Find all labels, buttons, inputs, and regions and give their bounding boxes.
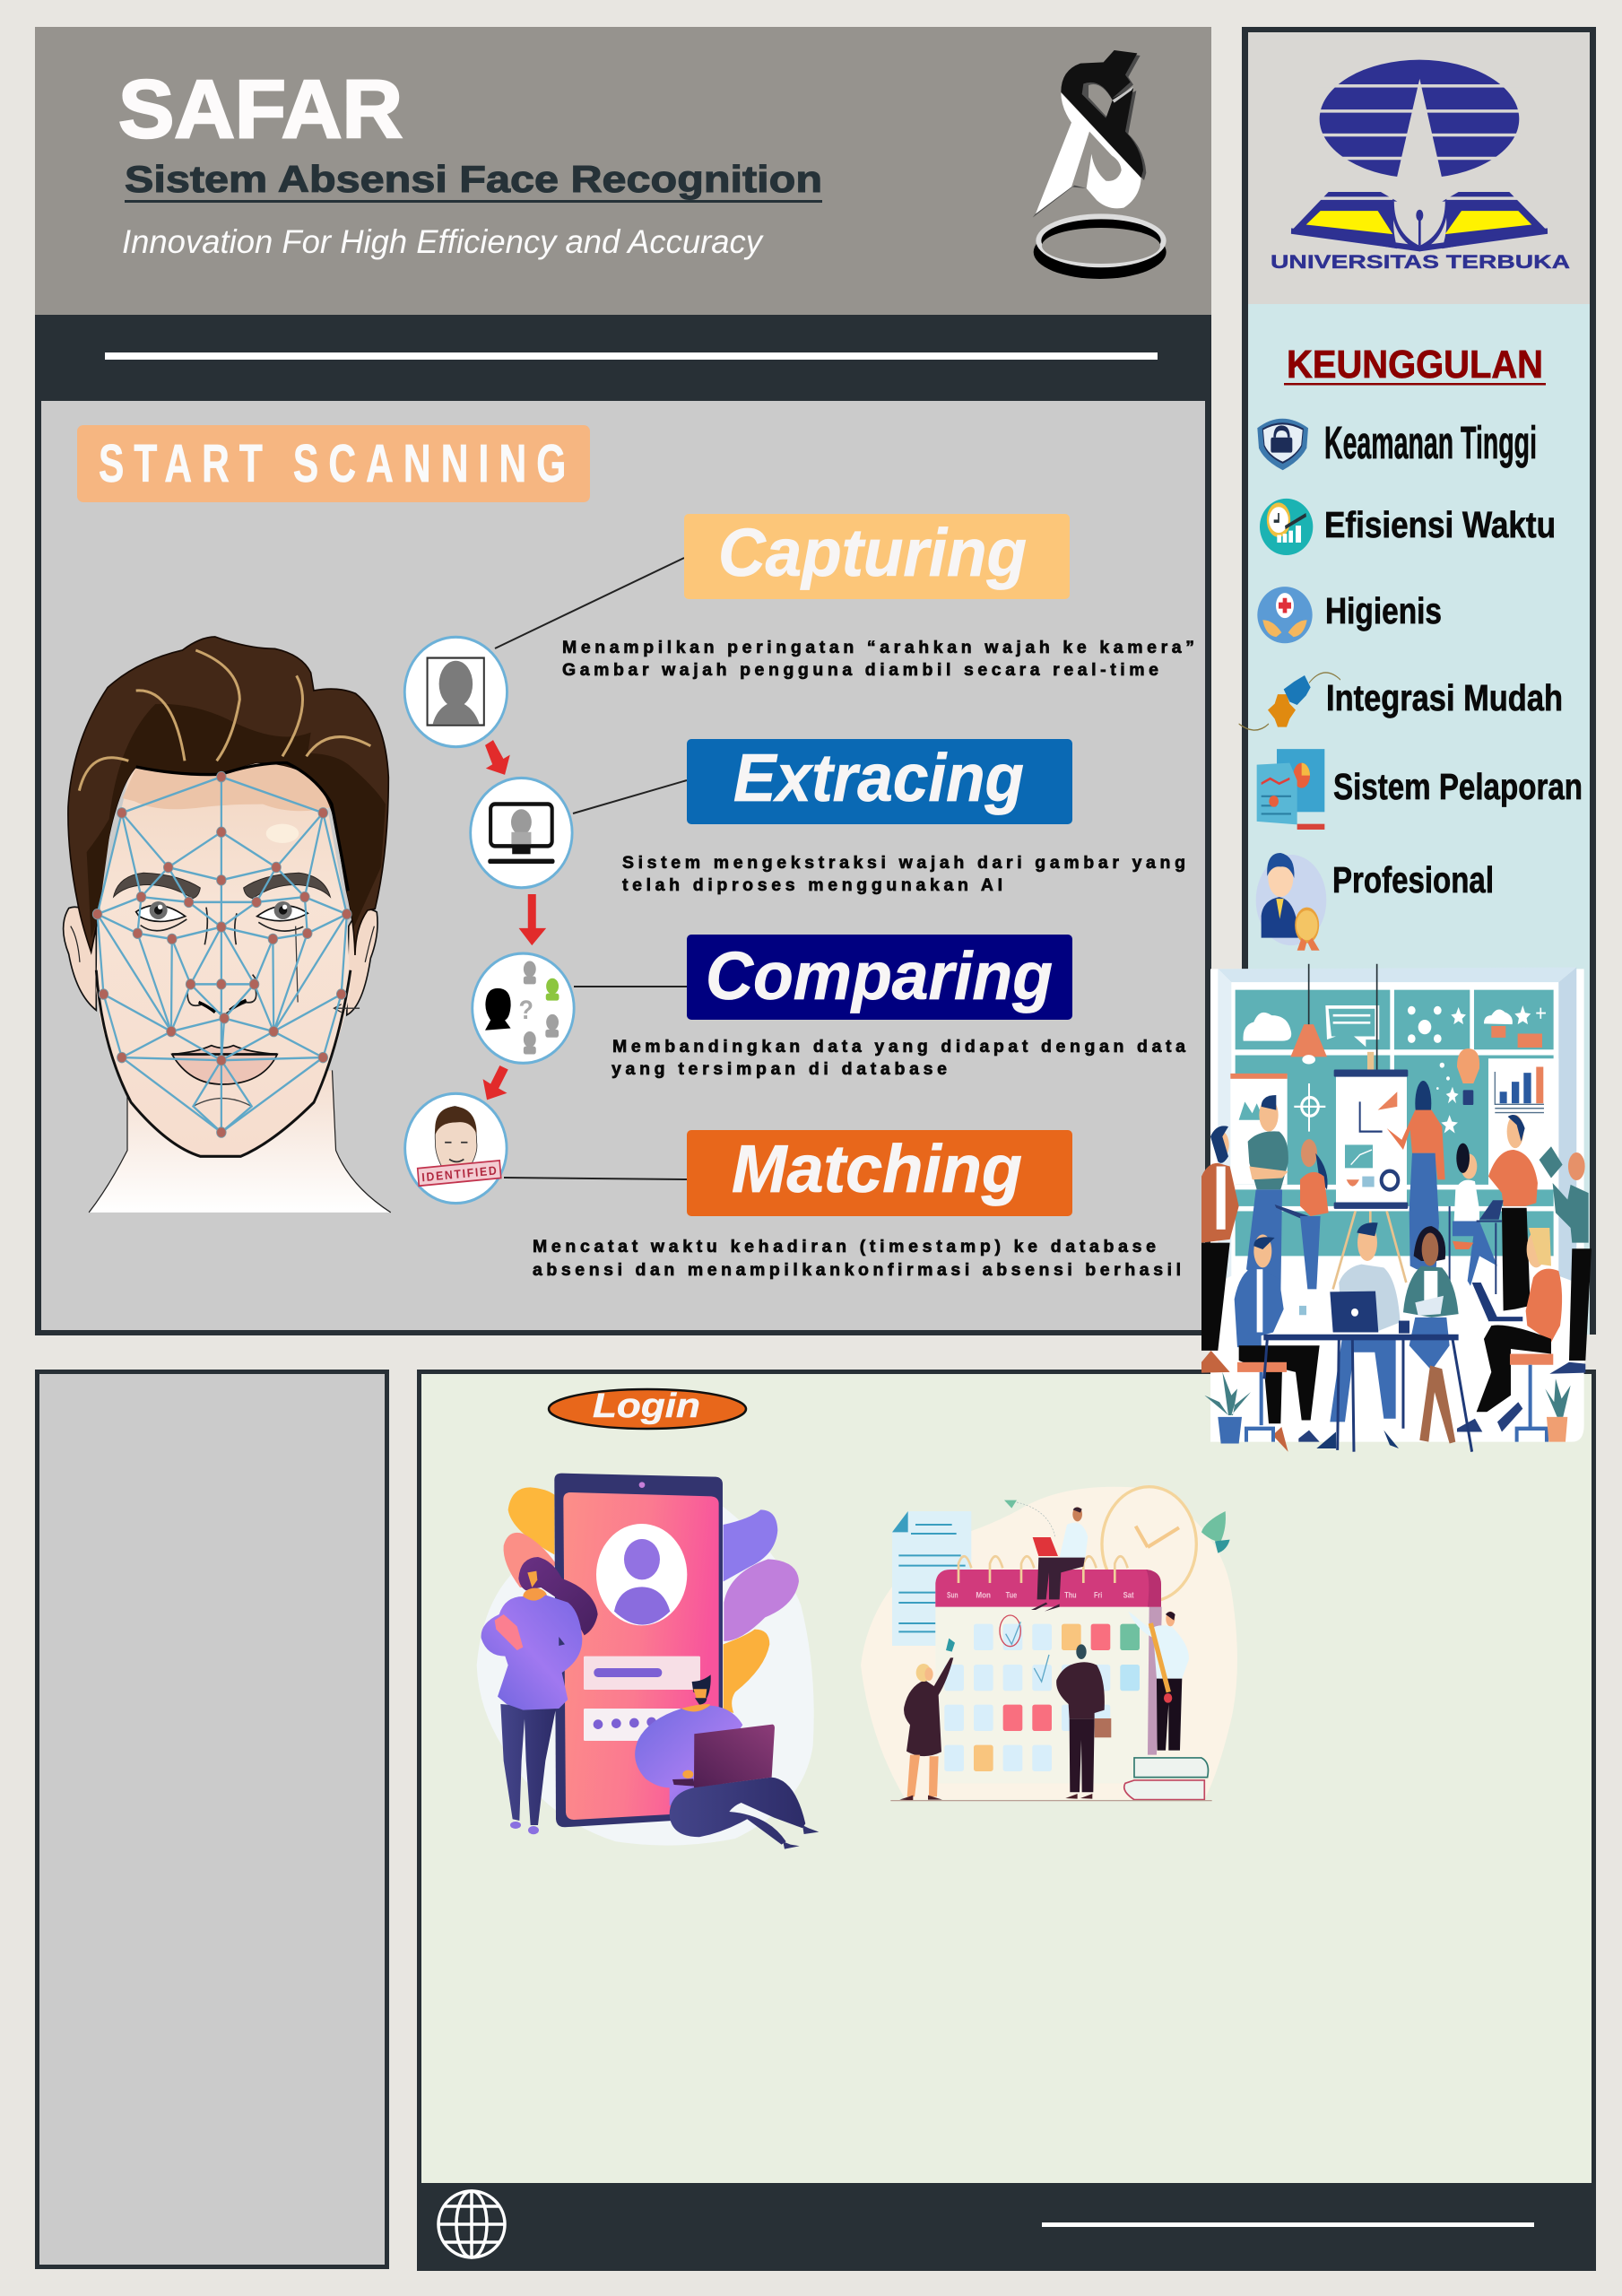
text: profesional: Profesional <box>1332 859 1494 900</box>
person: bearded man <box>1201 1126 1239 1373</box>
panel: login and attendance <box>417 1372 1596 2270</box>
icon: professional person <box>1256 853 1326 951</box>
panel: empty sidebar <box>38 1372 387 2267</box>
tagline: Innovation For High Efficiency and Accuracy <box>122 223 764 260</box>
text: capturing description: Menampilkan peringatan “arahkan wajah ke kamera” <box>562 638 1194 657</box>
arrow: step 2 to 3 <box>519 894 546 945</box>
icon: laptop extraction <box>471 778 572 888</box>
step: comparing: Comparing <box>706 938 1053 1013</box>
illustration: attendance calendar: Sun <box>947 1591 958 1600</box>
face scan illustration <box>64 637 391 1213</box>
icon: plant right <box>1545 1378 1571 1442</box>
heading: start scanning: START SCANNING <box>99 433 566 493</box>
text: comparing description: yang tersimpan di database <box>612 1059 947 1079</box>
person: woman at back table <box>1450 1144 1504 1294</box>
icon: time efficiency <box>1260 499 1313 555</box>
panel: start scanning <box>35 401 1211 1335</box>
step: extracing: Extracing <box>733 740 1024 815</box>
person: presenter <box>1387 1081 1445 1269</box>
mesh nodes <box>92 771 351 1137</box>
button: login <box>549 1387 746 1429</box>
facial mesh <box>98 777 347 1133</box>
text: matching description <box>533 1237 1181 1280</box>
icon: identified face <box>405 1093 507 1204</box>
step: matching <box>687 1130 1072 1216</box>
logo: Universitas Terbuka: UNIVERSITAS TERBUKA <box>1271 252 1570 273</box>
heading: keunggulan: KEUNGGULAN <box>1287 343 1543 387</box>
text: higienis: Higienis <box>1325 590 1442 631</box>
person: seated man left <box>1235 1234 1320 1452</box>
icon: comparing silhouettes: ? <box>519 995 533 1024</box>
person: standing man in orange <box>1488 1115 1538 1310</box>
illustration: attendance calendar: Thu <box>1064 1591 1077 1600</box>
text: extracing description <box>622 853 1185 895</box>
step: capturing: Capturing <box>718 515 1027 590</box>
person: woman with clipboard <box>1275 1139 1329 1289</box>
icon: identified face: IDENTIFIED <box>421 1163 497 1185</box>
text: comparing description: Membandingkan data yang didapat dengan data <box>612 1037 1185 1057</box>
person: arms crossed man <box>1246 1095 1288 1296</box>
panel: university and advantages <box>1239 27 1596 1335</box>
person: woman with notebook <box>1540 1146 1592 1374</box>
illustration: team collaboration <box>1201 964 1592 1452</box>
illustration: attendance calendar: Tue <box>1006 1591 1017 1600</box>
connector lines <box>495 558 687 1179</box>
icon: SAFAR logo <box>1033 50 1167 279</box>
logo: Universitas Terbuka <box>1271 60 1570 273</box>
arrow: step 1 to 2 <box>485 740 510 775</box>
person: woman center <box>1403 1226 1459 1443</box>
icon: comparing silhouettes <box>473 953 574 1063</box>
icon: plant left <box>1204 1372 1251 1443</box>
text: comparing description <box>612 1037 1185 1079</box>
text: matching description: absensi dan menampilkankonfirmasi absensi berhasil <box>533 1260 1181 1280</box>
process flow circles <box>404 637 574 1204</box>
illustration: attendance calendar: Fri <box>1094 1591 1102 1600</box>
icon: integration puzzle <box>1239 673 1340 730</box>
person: seated man center <box>1316 1222 1401 1448</box>
icon: globe <box>438 2191 505 2257</box>
illustration: attendance calendar: Sat <box>1123 1591 1134 1600</box>
subtitle: Sistem Absensi Face Recognition <box>125 158 822 200</box>
text: capturing description <box>562 638 1194 680</box>
text: extracing description: Sistem mengekstraksi wajah dari gambar yang <box>622 853 1185 873</box>
arrow: step 3 to 4 <box>483 1065 508 1100</box>
step: matching: Matching <box>732 1131 1022 1206</box>
text: efisiensi waktu: Efisiensi Waktu <box>1324 504 1556 545</box>
text: extracing description: telah diproses menggunakan AI <box>622 875 1002 895</box>
illustration: mobile login <box>477 1474 819 1849</box>
text: integrasi mudah: Integrasi Mudah <box>1326 677 1563 718</box>
illustration: attendance calendar <box>861 1487 1237 1801</box>
panel: header <box>35 27 1211 401</box>
icon: security shield <box>1257 419 1308 470</box>
person: seated man right <box>1457 1228 1562 1442</box>
button: login: Login <box>593 1387 700 1425</box>
text: capturing description: Gambar wajah pengguna diambil secara real-time <box>562 660 1158 680</box>
icon: reporting documents <box>1257 749 1324 830</box>
illustration: attendance calendar: Mon <box>976 1591 991 1600</box>
text: matching description: Mencatat waktu kehadiran (timestamp) ke database <box>533 1237 1156 1257</box>
icon: hygiene hands <box>1257 587 1313 643</box>
icon: captured portrait <box>404 637 507 747</box>
title: SAFAR <box>118 64 403 155</box>
table <box>1263 1337 1472 1452</box>
